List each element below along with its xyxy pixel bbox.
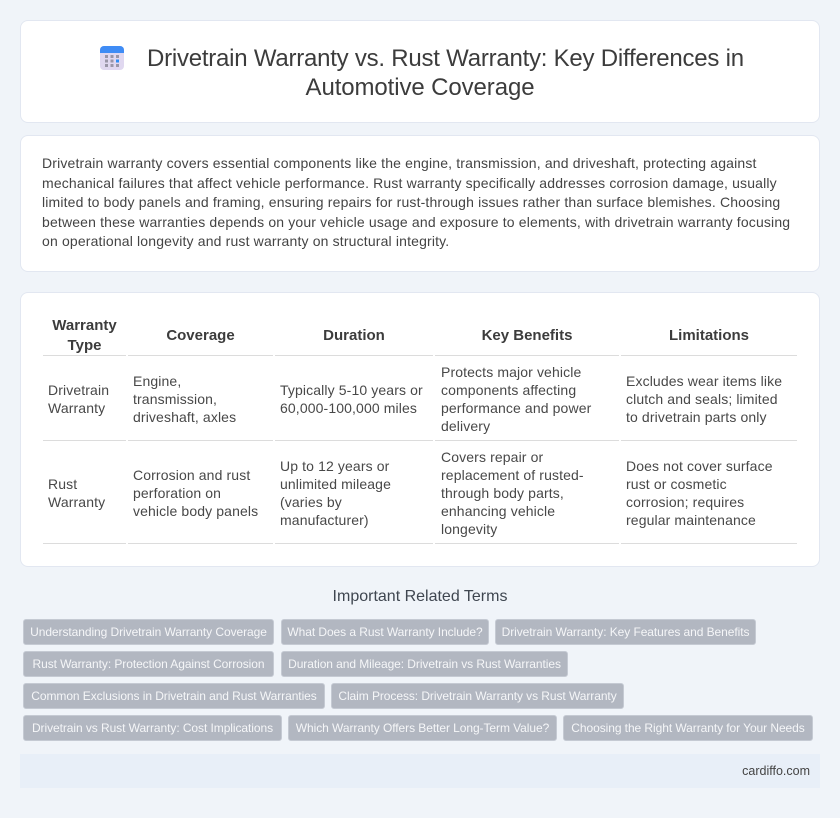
table row: rust warranty: Up to 12 years or	[280, 458, 389, 474]
related terms tags: Drivetrain vs Rust Warranty: Cost Implications	[32, 721, 273, 735]
table header: Coverage	[166, 327, 235, 344]
table row: rust warranty: Corrosion and rust	[133, 467, 250, 483]
table header: Key Benefits	[482, 327, 572, 344]
table row: rust warranty: enhancing vehicle	[441, 503, 555, 519]
title	[147, 45, 744, 101]
table row: drivetrain warranty: Engine,	[133, 373, 181, 389]
table row: rust warranty: longevity	[441, 521, 497, 537]
title: Automotive Coverage	[306, 74, 534, 101]
table row: drivetrain warranty	[43, 364, 797, 441]
panel: header	[20, 20, 820, 123]
table row: rust warranty: Warranty	[48, 494, 105, 510]
summary paragraph: Drivetrain warranty covers essential components like the engine, transmission, and driveshaft, protecting against	[42, 155, 757, 171]
table row: drivetrain warranty: transmission,	[133, 391, 217, 407]
panel: summary text	[20, 135, 820, 272]
table header	[43, 317, 797, 356]
related terms tags	[23, 619, 813, 741]
summary paragraph: limited to body panels and framing, ensuring repairs for rust-through issues rather than surface blemishes. Choosing	[42, 194, 780, 210]
table row: rust warranty: replacement of rusted-	[441, 467, 584, 483]
related terms tags: Common Exclusions in Drivetrain and Rust Warranties	[31, 689, 317, 703]
table row: drivetrain warranty: performance and power	[441, 400, 591, 416]
table row: rust warranty	[43, 449, 797, 544]
related terms tags: Duration and Mileage: Drivetrain vs Rust Warranties	[288, 657, 561, 671]
table row: drivetrain warranty: delivery	[441, 418, 490, 434]
table header: Duration	[323, 327, 385, 344]
title: Drivetrain Warranty vs. Rust Warranty: Key Differences in	[147, 45, 744, 72]
related terms tags: Understanding Drivetrain Warranty Coverage	[30, 625, 267, 639]
table row: drivetrain warranty: to drivetrain parts only	[626, 409, 767, 425]
related terms tags: Claim Process: Drivetrain Warranty vs Rust Warranty	[338, 689, 617, 703]
footer bar	[20, 754, 820, 788]
table row: rust warranty: Rust	[48, 476, 77, 492]
table header: Type	[68, 337, 101, 354]
footer source text: cardiffo.com	[742, 764, 810, 778]
table row: drivetrain warranty: Typically 5-10 years or	[280, 382, 423, 398]
related terms tags: Choosing the Right Warranty for Your Needs	[571, 721, 805, 735]
related terms tags: Which Warranty Offers Better Long-Term Value?	[296, 721, 549, 735]
summary paragraph: between these warranties depends on your vehicle usage and exposure to elements, with drivetrain warranty focusing	[42, 214, 790, 230]
related terms tags: Rust Warranty: Protection Against Corrosion	[32, 657, 264, 671]
table row: rust warranty: Covers repair or	[441, 449, 543, 465]
table row: drivetrain warranty: clutch and seals; limited	[626, 391, 778, 407]
summary paragraph: on operational longevity and rust warranty on structural integrity.	[42, 233, 449, 249]
table row: rust warranty: corrosion; requires	[626, 494, 744, 510]
related terms tags: Drivetrain Warranty: Key Features and Benefits	[502, 625, 749, 639]
icon: calendar	[100, 46, 124, 70]
table row: rust warranty: Does not cover surface	[626, 458, 773, 474]
summary paragraph: mechanical failures that affect vehicle performance. Rust warranty specifically addresses corrosion damage, usually	[42, 175, 777, 191]
table row: drivetrain warranty: Drivetrain	[48, 382, 109, 398]
table row: rust warranty: manufacturer)	[280, 512, 369, 528]
table row: rust warranty: vehicle body panels	[133, 503, 258, 519]
table row: rust warranty: regular maintenance	[626, 512, 756, 528]
table row: rust warranty: rust or cosmetic	[626, 476, 727, 492]
table header: Warranty	[52, 317, 117, 334]
table row: rust warranty: perforation on	[133, 485, 221, 501]
table row: drivetrain warranty: 60,000-100,000 miles	[280, 400, 417, 416]
table row: rust warranty: through body parts,	[441, 485, 564, 501]
table row: drivetrain warranty: Excludes wear items like	[626, 373, 782, 389]
summary paragraph	[42, 155, 790, 249]
table row: rust warranty: unlimited mileage	[280, 476, 391, 492]
heading: important related terms: Important Related Terms	[333, 588, 507, 605]
table header: Limitations	[669, 327, 749, 344]
related terms tags: What Does a Rust Warranty Include?	[287, 625, 483, 639]
table row: drivetrain warranty: driveshaft, axles	[133, 409, 236, 425]
table row: drivetrain warranty: components affecting	[441, 382, 576, 398]
table row: drivetrain warranty: Warranty	[48, 400, 105, 416]
panel: comparison table	[20, 292, 820, 567]
table row: drivetrain warranty: Protects major vehicle	[441, 364, 581, 380]
table row: rust warranty: (varies by	[280, 494, 342, 510]
